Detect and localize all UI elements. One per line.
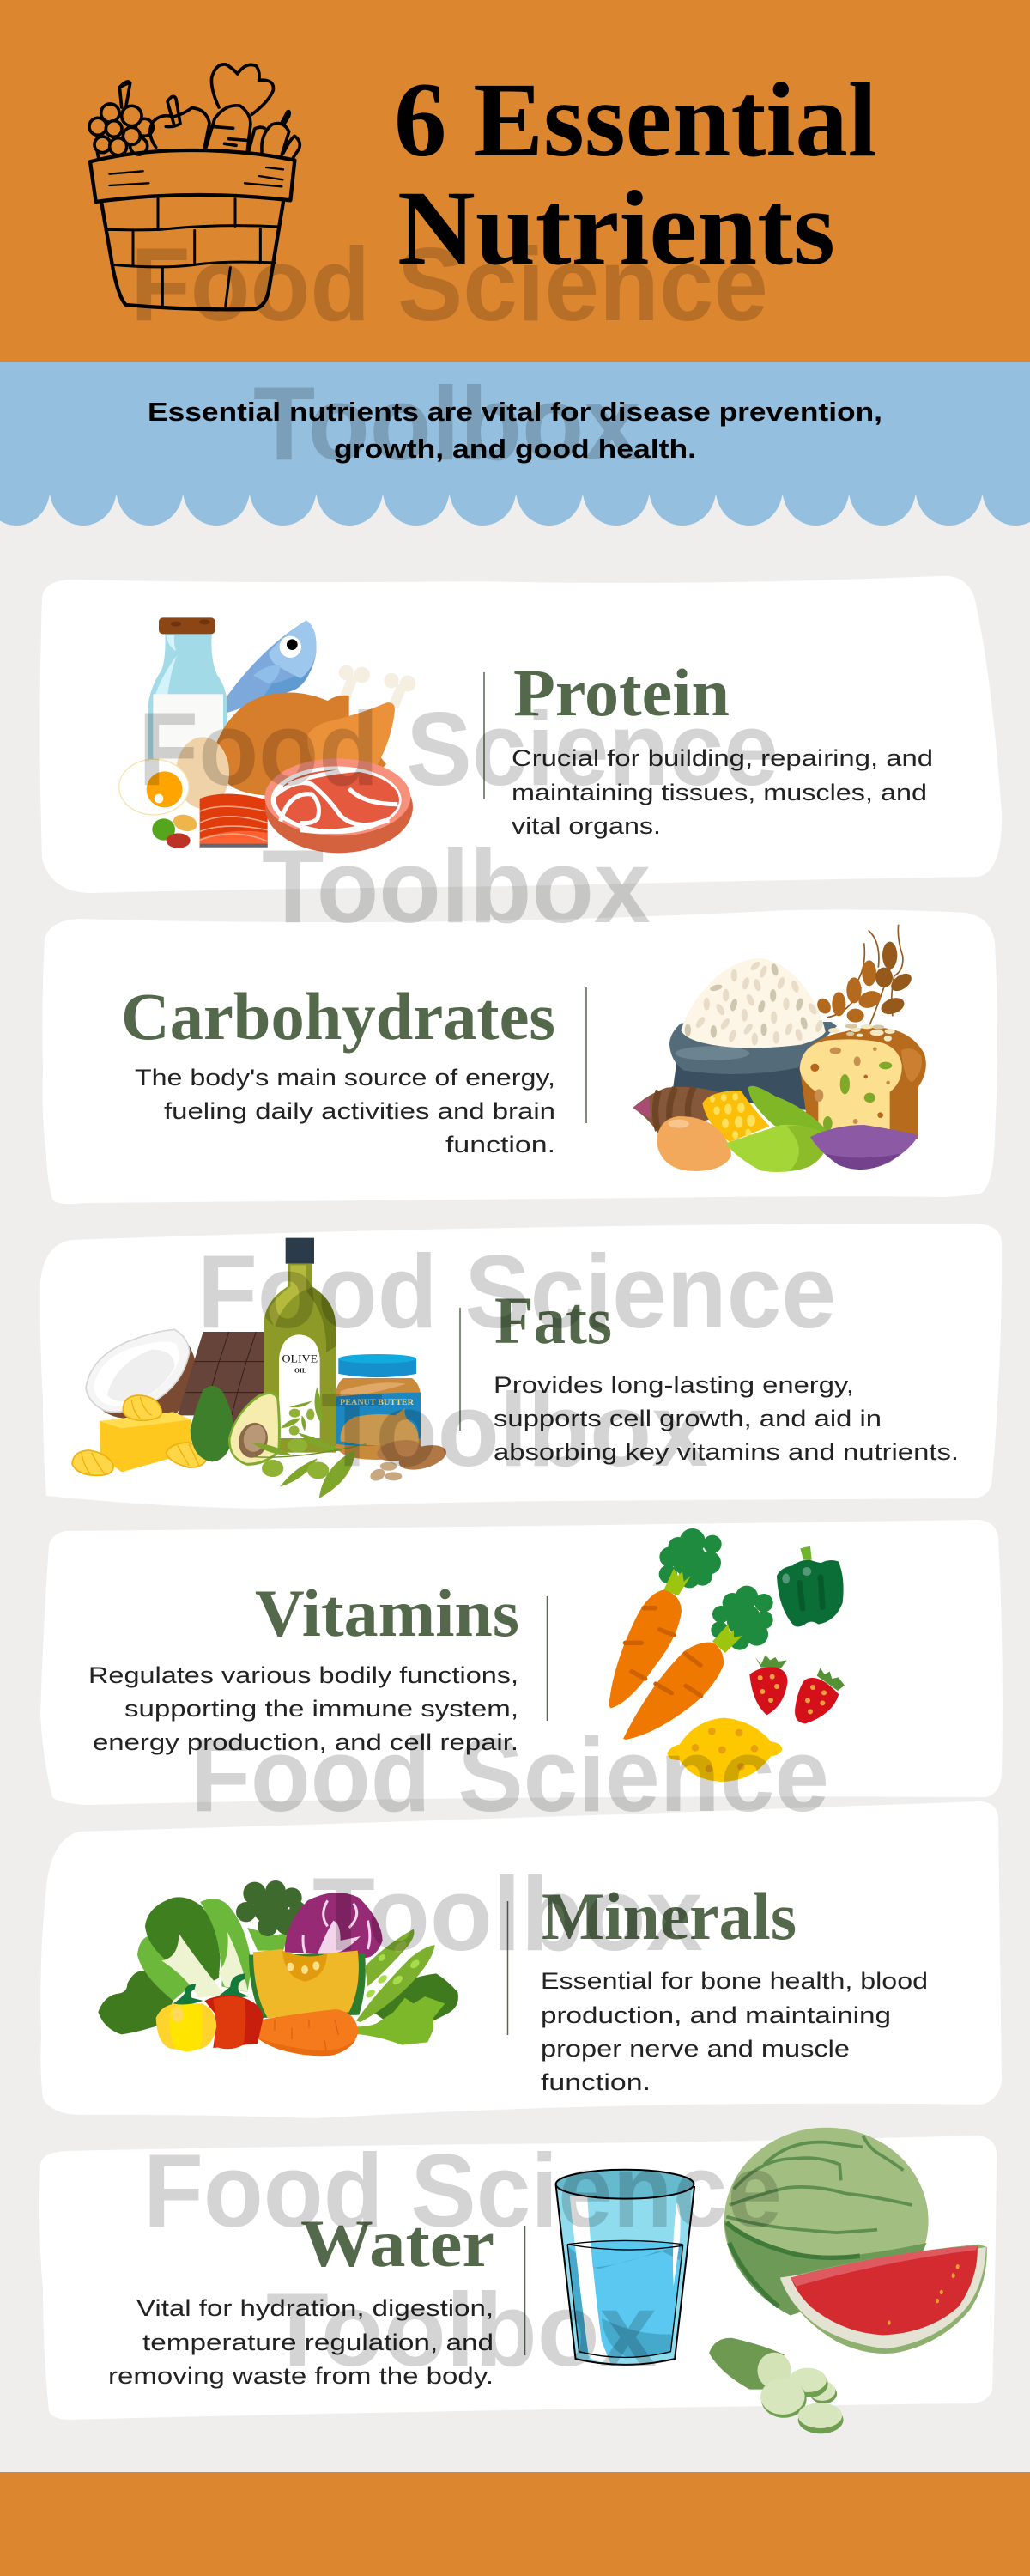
panel: water (39, 2128, 997, 2433)
description: Essential for bone health, blood (541, 1968, 928, 1994)
description (108, 2295, 494, 2389)
footer band (0, 2472, 1030, 2576)
description: Provides long-lasting energy, (494, 1372, 854, 1398)
watermark: Food Science Toolbox (130, 226, 836, 2388)
heading: Vitamins (255, 1576, 519, 1650)
divider (524, 2226, 525, 2355)
description: temperature regulation, and (142, 2330, 494, 2355)
description (88, 1662, 518, 1755)
watermark: Food Science Toolbox: Toolbox (253, 365, 640, 482)
description: supports cell growth, and aid in (494, 1406, 882, 1431)
description: The body's main source of energy, (135, 1065, 555, 1091)
panel: fats (40, 1224, 1002, 1509)
watermark: Food Science Toolbox: Food Science (143, 2132, 782, 2249)
description: Crucial for building, repairing, and (512, 745, 933, 771)
illustration: glass of water (556, 2170, 694, 2365)
watermark: Food Science Toolbox: Food Science (191, 1716, 829, 1833)
illustration: fat-rich foods: OIL (294, 1367, 306, 1375)
illustration: vegetables (98, 1880, 458, 2056)
intro band with scalloped edge (0, 362, 1030, 526)
illustration: fat-rich foods (72, 1238, 449, 1498)
divider (506, 1901, 508, 2035)
illustration: carbohydrate foods (633, 925, 926, 1172)
panel: protein (39, 576, 1002, 893)
divider (585, 987, 587, 1123)
description: Vital for hydration, digestion, (136, 2295, 494, 2321)
heading: Fats (494, 1283, 612, 1358)
description (494, 1372, 959, 1465)
description (541, 1968, 928, 2095)
description: absorbing key vitamins and nutrients. (494, 1439, 959, 1465)
intro text (148, 397, 882, 464)
description: proper nerve and muscle (541, 2036, 850, 2062)
divider (483, 672, 485, 799)
description: function. (445, 1132, 555, 1157)
description: supporting the immune system, (124, 1696, 518, 1722)
illustration: fat-rich foods: PEANUT BUTTER (340, 1398, 415, 1406)
heading: Carbohydrates (121, 979, 555, 1054)
title: Nutrients (397, 169, 835, 287)
heading: Protein (513, 655, 730, 730)
description: production, and maintaining (541, 2002, 891, 2028)
illustration: carrots, pepper, strawberries, lemon (609, 1528, 845, 1782)
watermark: Food Science Toolbox: Food Science (197, 1233, 836, 1350)
watermark: Food Science Toolbox: Toolbox (266, 2271, 657, 2388)
intro text: growth, and good health. (334, 434, 696, 464)
header band (0, 0, 1030, 362)
watermark: Food Science Toolbox: Food Science (138, 690, 779, 807)
illustration: fat-rich foods: OLIVE (282, 1353, 318, 1365)
title: 6 Essential (394, 61, 877, 179)
panel: carbohydrates (42, 909, 997, 1204)
description: Regulates various bodily functions, (88, 1662, 518, 1688)
title (394, 61, 877, 287)
divider (546, 1596, 548, 1721)
divider (459, 1308, 461, 1431)
watermark: Food Science Toolbox: Toolbox (321, 1371, 708, 1488)
panel: vitamins (40, 1520, 1003, 1805)
description (512, 745, 933, 839)
watermark: Food Science Toolbox: Toolbox (262, 828, 651, 945)
watermark: Food Science Toolbox: Food Science (130, 226, 768, 343)
description: energy production, and cell repair. (93, 1729, 518, 1755)
description: fueling daily activities and brain (164, 1098, 555, 1124)
watermark: Food Science Toolbox: Toolbox (312, 1856, 703, 1972)
icon: basket of produce (89, 64, 300, 309)
heading: Water (300, 2206, 494, 2281)
panel: minerals (40, 1801, 1002, 2118)
description: maintaining tissues, muscles, and (512, 780, 927, 805)
intro text: Essential nutrients are vital for disease prevention, (148, 397, 882, 427)
illustration: protein foods (119, 617, 415, 853)
illustration: watermelon and cucumber (709, 2128, 987, 2433)
description: vital organs. (512, 813, 661, 839)
heading: Minerals (542, 1879, 797, 1953)
description: removing waste from the body. (108, 2363, 494, 2389)
description (135, 1065, 555, 1157)
description: function. (541, 2069, 651, 2095)
